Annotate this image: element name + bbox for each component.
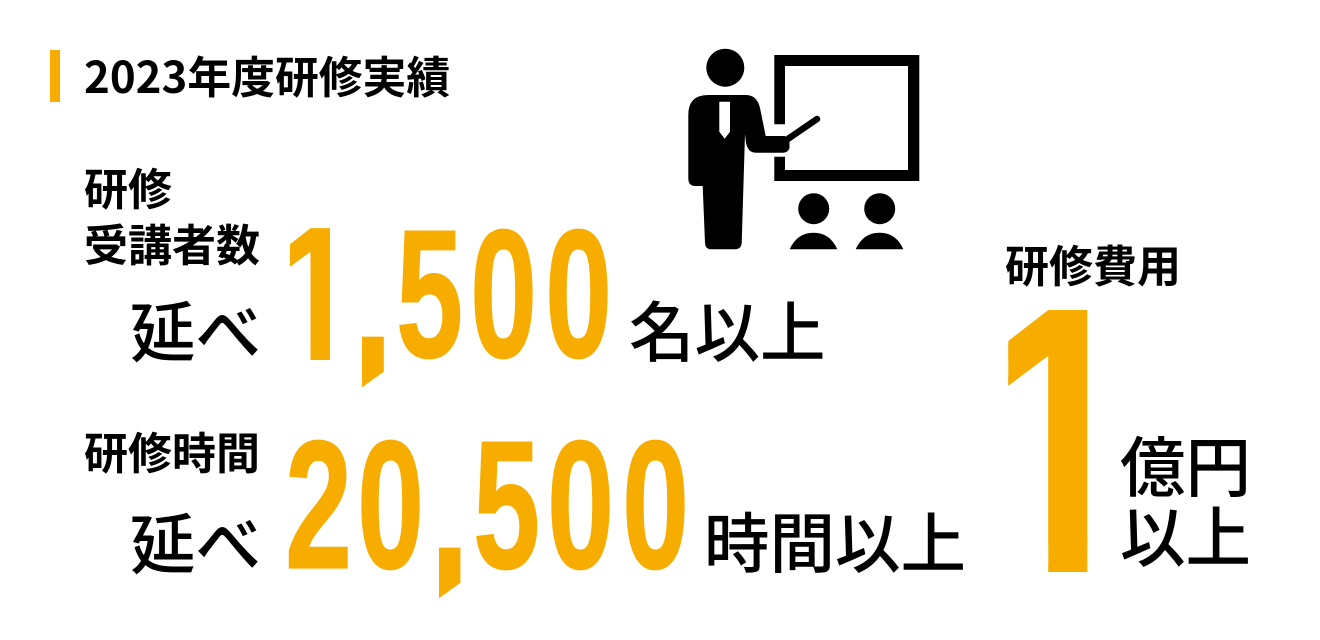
unit: hours or more: 時間以上: [704, 491, 966, 586]
number: 1,500: 0: [545, 192, 612, 396]
title: 2023年度研修実績: [84, 42, 450, 106]
prefix: cumulative participants: 延べ: [130, 280, 261, 375]
unit: 100 million yen or more: 以上: [1120, 485, 1251, 580]
number: 20,500: ,: [415, 369, 479, 626]
number: 1,500: 1: [283, 184, 355, 402]
number: 20,500: 5: [473, 403, 540, 607]
number: 1,500: 5: [396, 192, 463, 396]
number: 20,500: 0: [622, 403, 689, 607]
label: training cost: 研修費用: [1005, 231, 1181, 295]
label: participants: 研修: [84, 154, 172, 218]
unit: 100 million yen or more: 億円: [1120, 415, 1251, 510]
unit: 100 million yen or more: [1120, 415, 1251, 580]
prefix: cumulative hours: 延べ: [130, 492, 261, 587]
number: 20,500: [288, 440, 685, 598]
label: training hours: 研修時間: [84, 418, 260, 482]
number: 20,500: 0: [547, 403, 614, 607]
label: participants: 受講者数: [84, 210, 260, 274]
number: 1,500: [290, 228, 608, 388]
unit: people or more: 名以上: [629, 280, 826, 375]
number: 20,500: 2: [285, 403, 352, 607]
number: 20,500: 0: [357, 403, 424, 607]
number: 1,500: ,: [338, 158, 402, 415]
label: participants: [84, 154, 260, 274]
number: 1,500: 0: [470, 192, 537, 396]
heading accent bar: [50, 50, 60, 102]
